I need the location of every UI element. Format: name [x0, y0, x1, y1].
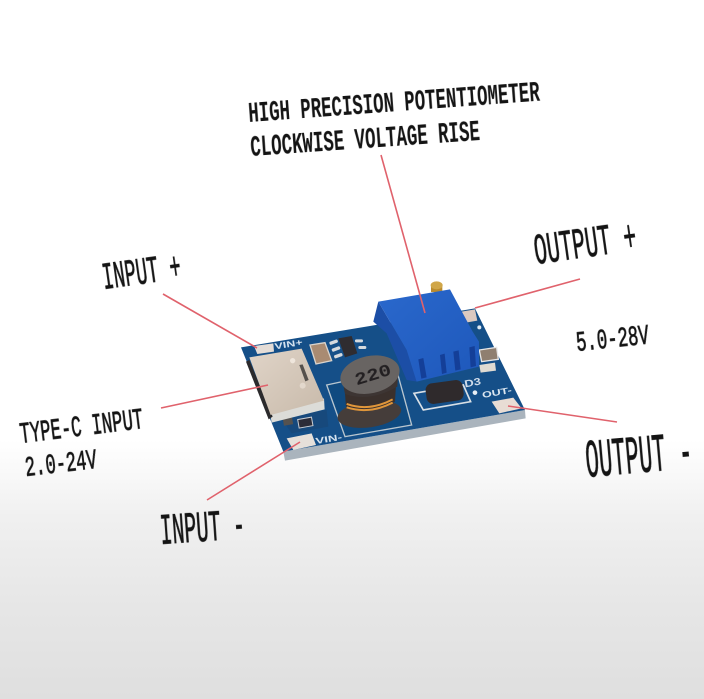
silkscreen: VIN-: VIN-: [315, 432, 343, 446]
line: potentiometer: [381, 155, 425, 313]
pad: OUT-: [492, 398, 522, 413]
inductor marking: 220: [353, 362, 394, 391]
pad: OUT+: [462, 309, 477, 323]
pot ribs: [418, 346, 476, 379]
silkscreen: OUT-: OUT-: [481, 385, 513, 400]
potentiometer: [373, 281, 479, 382]
label: type-c input: TYPE-C INPUT: [18, 404, 145, 453]
leader lines: [161, 155, 617, 500]
brass screw: [431, 281, 443, 292]
infographic canvas: INPUT -: [158, 502, 247, 558]
inductor 220: [336, 350, 403, 432]
pad: VIN+: [254, 343, 274, 354]
line: input minus: [207, 442, 300, 500]
label: potentiometer line 2: CLOCKWISE VOLTAGE RISE: [249, 116, 481, 166]
circuit board module: [241, 281, 526, 461]
board edge: [283, 410, 526, 461]
tan capacitor: [310, 343, 332, 364]
line: input plus: [163, 294, 257, 348]
small parts under connector: [280, 410, 328, 433]
label: output voltage: 5.0-28V: [575, 321, 651, 360]
silkscreen: D3: D3: [464, 376, 482, 390]
line: output minus: [508, 406, 617, 422]
silkscreen: VIN+: VIN+: [274, 337, 303, 351]
diode: [414, 379, 471, 410]
line: type-c: [161, 385, 268, 408]
line: output plus: [475, 279, 580, 308]
small SMD parts near OUT+: [473, 325, 498, 395]
label: input voltage: 2.0-24V: [24, 446, 99, 485]
label: input plus: INPUT +: [100, 247, 184, 301]
USB Type-C connector: [246, 349, 325, 423]
pad: VIN-: [287, 433, 316, 450]
board top: [241, 308, 525, 452]
IC chip with pins: [329, 336, 366, 359]
